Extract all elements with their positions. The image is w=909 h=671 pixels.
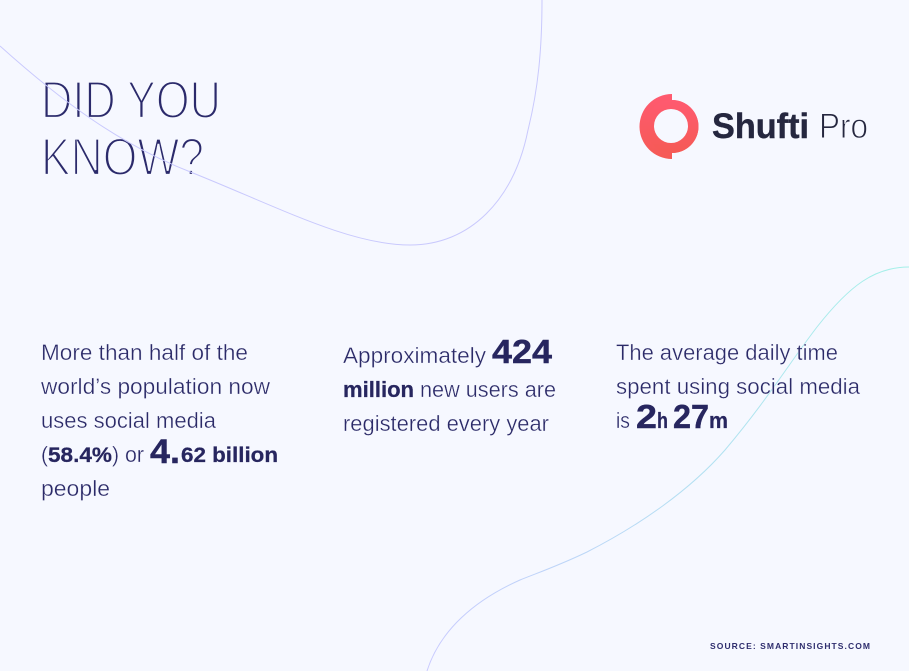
title: KNOW? [41,128,204,187]
text block: world population: or [125,442,144,467]
text block: daily time [616,340,860,435]
text block: new users: million [343,377,414,402]
text block: world population: ) [112,442,119,467]
title [41,71,221,187]
curve: cyan [427,267,909,671]
text block: daily time: 2 [636,398,657,435]
text block: daily time: 27 [673,398,709,435]
text block: new users: Approximately [343,343,487,368]
text block: world population: uses social media [41,408,216,433]
curve: purple [0,0,542,245]
text block: world population: world’s population now [40,374,271,399]
text block: world population: ( [41,442,48,467]
text block: daily time: spent using social media [616,374,860,399]
text block: daily time: The average daily time [616,340,838,365]
text block: new users: 424 [492,333,553,370]
text block: new users: new users are [420,377,556,402]
text block: world population: 62 billion [181,444,278,467]
source note: SOURCE: SMARTINSIGHTS.COM [710,641,870,651]
text block: new users: registered every year [343,411,549,436]
text block: world population: 4. [150,433,180,471]
logo: Shufti Pro [640,94,868,159]
text block: daily time: m [709,408,728,433]
icon: logo ring [640,94,698,159]
text block: daily time: is [616,408,630,433]
text block: world population: 58.4% [48,444,112,467]
logo wordmark: Pro [819,107,868,146]
title: DID YOU [41,71,221,130]
text block: world population [40,340,278,501]
logo wordmark: Shufti [712,107,809,146]
text block: world population: people [41,476,110,501]
text block: daily time: h [657,408,668,433]
logo wordmark [712,107,868,146]
text block: world population: More than half of the [41,340,248,365]
text block: new users [343,333,556,436]
